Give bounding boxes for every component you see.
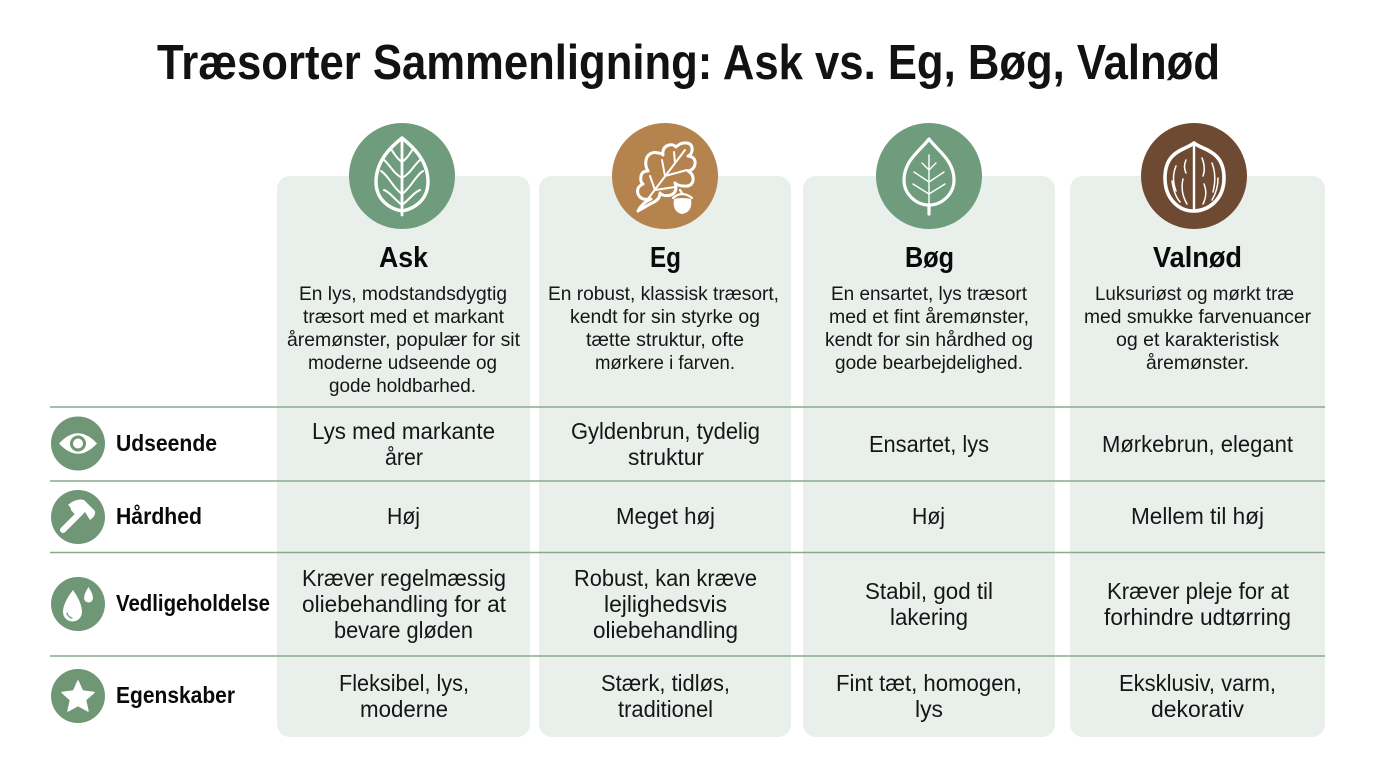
description: Ask: træsort med et markant bbox=[303, 306, 505, 328]
description: Ask: åremønster, populær for sit bbox=[287, 329, 521, 351]
description: Valnød bbox=[1084, 283, 1311, 374]
cell: Valnød appearance: Mørkebrun, elegant bbox=[1102, 431, 1294, 457]
cell: Bøg properties: Fint tæt, homogen, bbox=[836, 670, 1022, 696]
cell: Eg appearance: Gyldenbrun, tydelig bbox=[571, 418, 760, 444]
row: Egenskaber bbox=[51, 669, 235, 723]
icon: eye bbox=[51, 416, 105, 470]
description: Bøg: gode bearbejdelighed. bbox=[835, 352, 1023, 374]
icon: beech leaf bbox=[876, 123, 982, 229]
icon: walnut bbox=[1141, 123, 1247, 229]
label: Hårdhed: Hårdhed bbox=[116, 503, 202, 529]
cell: Valnød maintenance bbox=[1104, 578, 1291, 630]
row: Udseende bbox=[51, 416, 217, 470]
cell: Bøg properties: lys bbox=[915, 696, 943, 722]
panel: Valnød bbox=[1084, 242, 1311, 722]
row: Vedligeholdelse bbox=[51, 577, 270, 631]
description: Bøg: kendt for sin hårdhed og bbox=[825, 329, 1033, 351]
description: Valnød: Luksuriøst og mørkt træ bbox=[1095, 283, 1294, 305]
heading: Ask: Ask bbox=[379, 242, 429, 274]
cell: Valnød hardness: Mellem til høj bbox=[1131, 503, 1264, 529]
icon: ash leaf bbox=[349, 123, 455, 229]
cell: Valnød maintenance: forhindre udtørring bbox=[1104, 604, 1291, 630]
row: Hårdhed bbox=[51, 490, 202, 544]
title: Træsorter Sammenligning: Ask vs. Eg, Bøg, Valnød bbox=[157, 36, 1220, 90]
description: Eg bbox=[548, 283, 779, 374]
cell: Valnød maintenance: Kræver pleje for at bbox=[1107, 578, 1290, 604]
cell: Valnød properties: dekorativ bbox=[1151, 696, 1244, 722]
label: Vedligeholdelse: Vedligeholdelse bbox=[116, 590, 270, 616]
panel backgrounds bbox=[277, 176, 1325, 737]
description: Eg: kendt for sin styrke og bbox=[570, 306, 760, 328]
cell: Valnød properties bbox=[1119, 670, 1276, 722]
description: Ask: gode holdbarhed. bbox=[329, 375, 476, 397]
description: Ask bbox=[287, 283, 521, 397]
icon: star bbox=[51, 669, 105, 723]
cell: Eg properties: traditionel bbox=[618, 696, 713, 722]
description: Bøg: med et fint åremønster, bbox=[829, 306, 1029, 328]
cell: Bøg hardness: Høj bbox=[912, 503, 945, 529]
cell: Bøg properties bbox=[836, 670, 1022, 722]
cell: Eg properties: Stærk, tidløs, bbox=[601, 670, 730, 696]
cell: Bøg maintenance bbox=[865, 578, 993, 630]
cell: Ask properties: Fleksibel, lys, bbox=[339, 670, 469, 696]
cell: Ask appearance: årer bbox=[385, 444, 423, 470]
cell: Eg maintenance: oliebehandling bbox=[593, 617, 738, 643]
heading: Bøg: Bøg bbox=[905, 242, 954, 274]
icon: water drops bbox=[51, 577, 105, 631]
cell: Eg appearance bbox=[571, 418, 760, 470]
panel: Eg bbox=[548, 242, 779, 722]
cell: Eg maintenance bbox=[574, 565, 757, 643]
description: Ask: En lys, modstandsdygtig bbox=[299, 283, 507, 305]
heading: Eg: Eg bbox=[650, 242, 681, 274]
icon: hammer bbox=[51, 490, 105, 544]
description: Ask: moderne udseende og bbox=[308, 352, 497, 374]
cell: Ask properties: moderne bbox=[360, 696, 448, 722]
cell: Ask maintenance: bevare gløden bbox=[334, 617, 473, 643]
cell: Eg maintenance: Robust, kan kræve bbox=[574, 565, 757, 591]
description: Bøg bbox=[825, 283, 1033, 374]
cell: Eg maintenance: lejlighedsvis bbox=[604, 591, 727, 617]
description: Valnød: åremønster. bbox=[1146, 352, 1249, 374]
description: Eg: En robust, klassisk træsort, bbox=[548, 283, 779, 305]
cell: Ask appearance: Lys med markante bbox=[312, 418, 495, 444]
heading: Valnød: Valnød bbox=[1153, 242, 1242, 274]
label: Udseende: Udseende bbox=[116, 430, 217, 456]
cell: Ask maintenance bbox=[302, 565, 507, 643]
cell: Eg appearance: struktur bbox=[628, 444, 704, 470]
label: Egenskaber: Egenskaber bbox=[116, 682, 235, 708]
cell: Eg properties bbox=[601, 670, 730, 722]
cell: Ask appearance bbox=[312, 418, 495, 470]
panel: Ask bbox=[287, 242, 521, 722]
cell: Bøg maintenance: Stabil, god til bbox=[865, 578, 993, 604]
cell: Eg hardness: Meget høj bbox=[616, 503, 715, 529]
description: Eg: mørkere i farven. bbox=[595, 352, 735, 374]
description: Valnød: med smukke farvenuancer bbox=[1084, 306, 1311, 328]
cell: Bøg maintenance: lakering bbox=[890, 604, 968, 630]
description: Eg: tætte struktur, ofte bbox=[586, 329, 744, 351]
description: Bøg: En ensartet, lys træsort bbox=[831, 283, 1028, 305]
cell: Ask properties bbox=[339, 670, 469, 722]
cell: Ask hardness: Høj bbox=[387, 503, 420, 529]
cell: Bøg appearance: Ensartet, lys bbox=[869, 431, 989, 457]
cell: Ask maintenance: oliebehandling for at bbox=[302, 591, 507, 617]
description: Valnød: og et karakteristisk bbox=[1116, 329, 1279, 351]
icon: oak leaf and acorn bbox=[612, 123, 718, 229]
cell: Valnød properties: Eksklusiv, varm, bbox=[1119, 670, 1276, 696]
panel: Bøg bbox=[825, 242, 1033, 722]
cell: Ask maintenance: Kræver regelmæssig bbox=[302, 565, 506, 591]
